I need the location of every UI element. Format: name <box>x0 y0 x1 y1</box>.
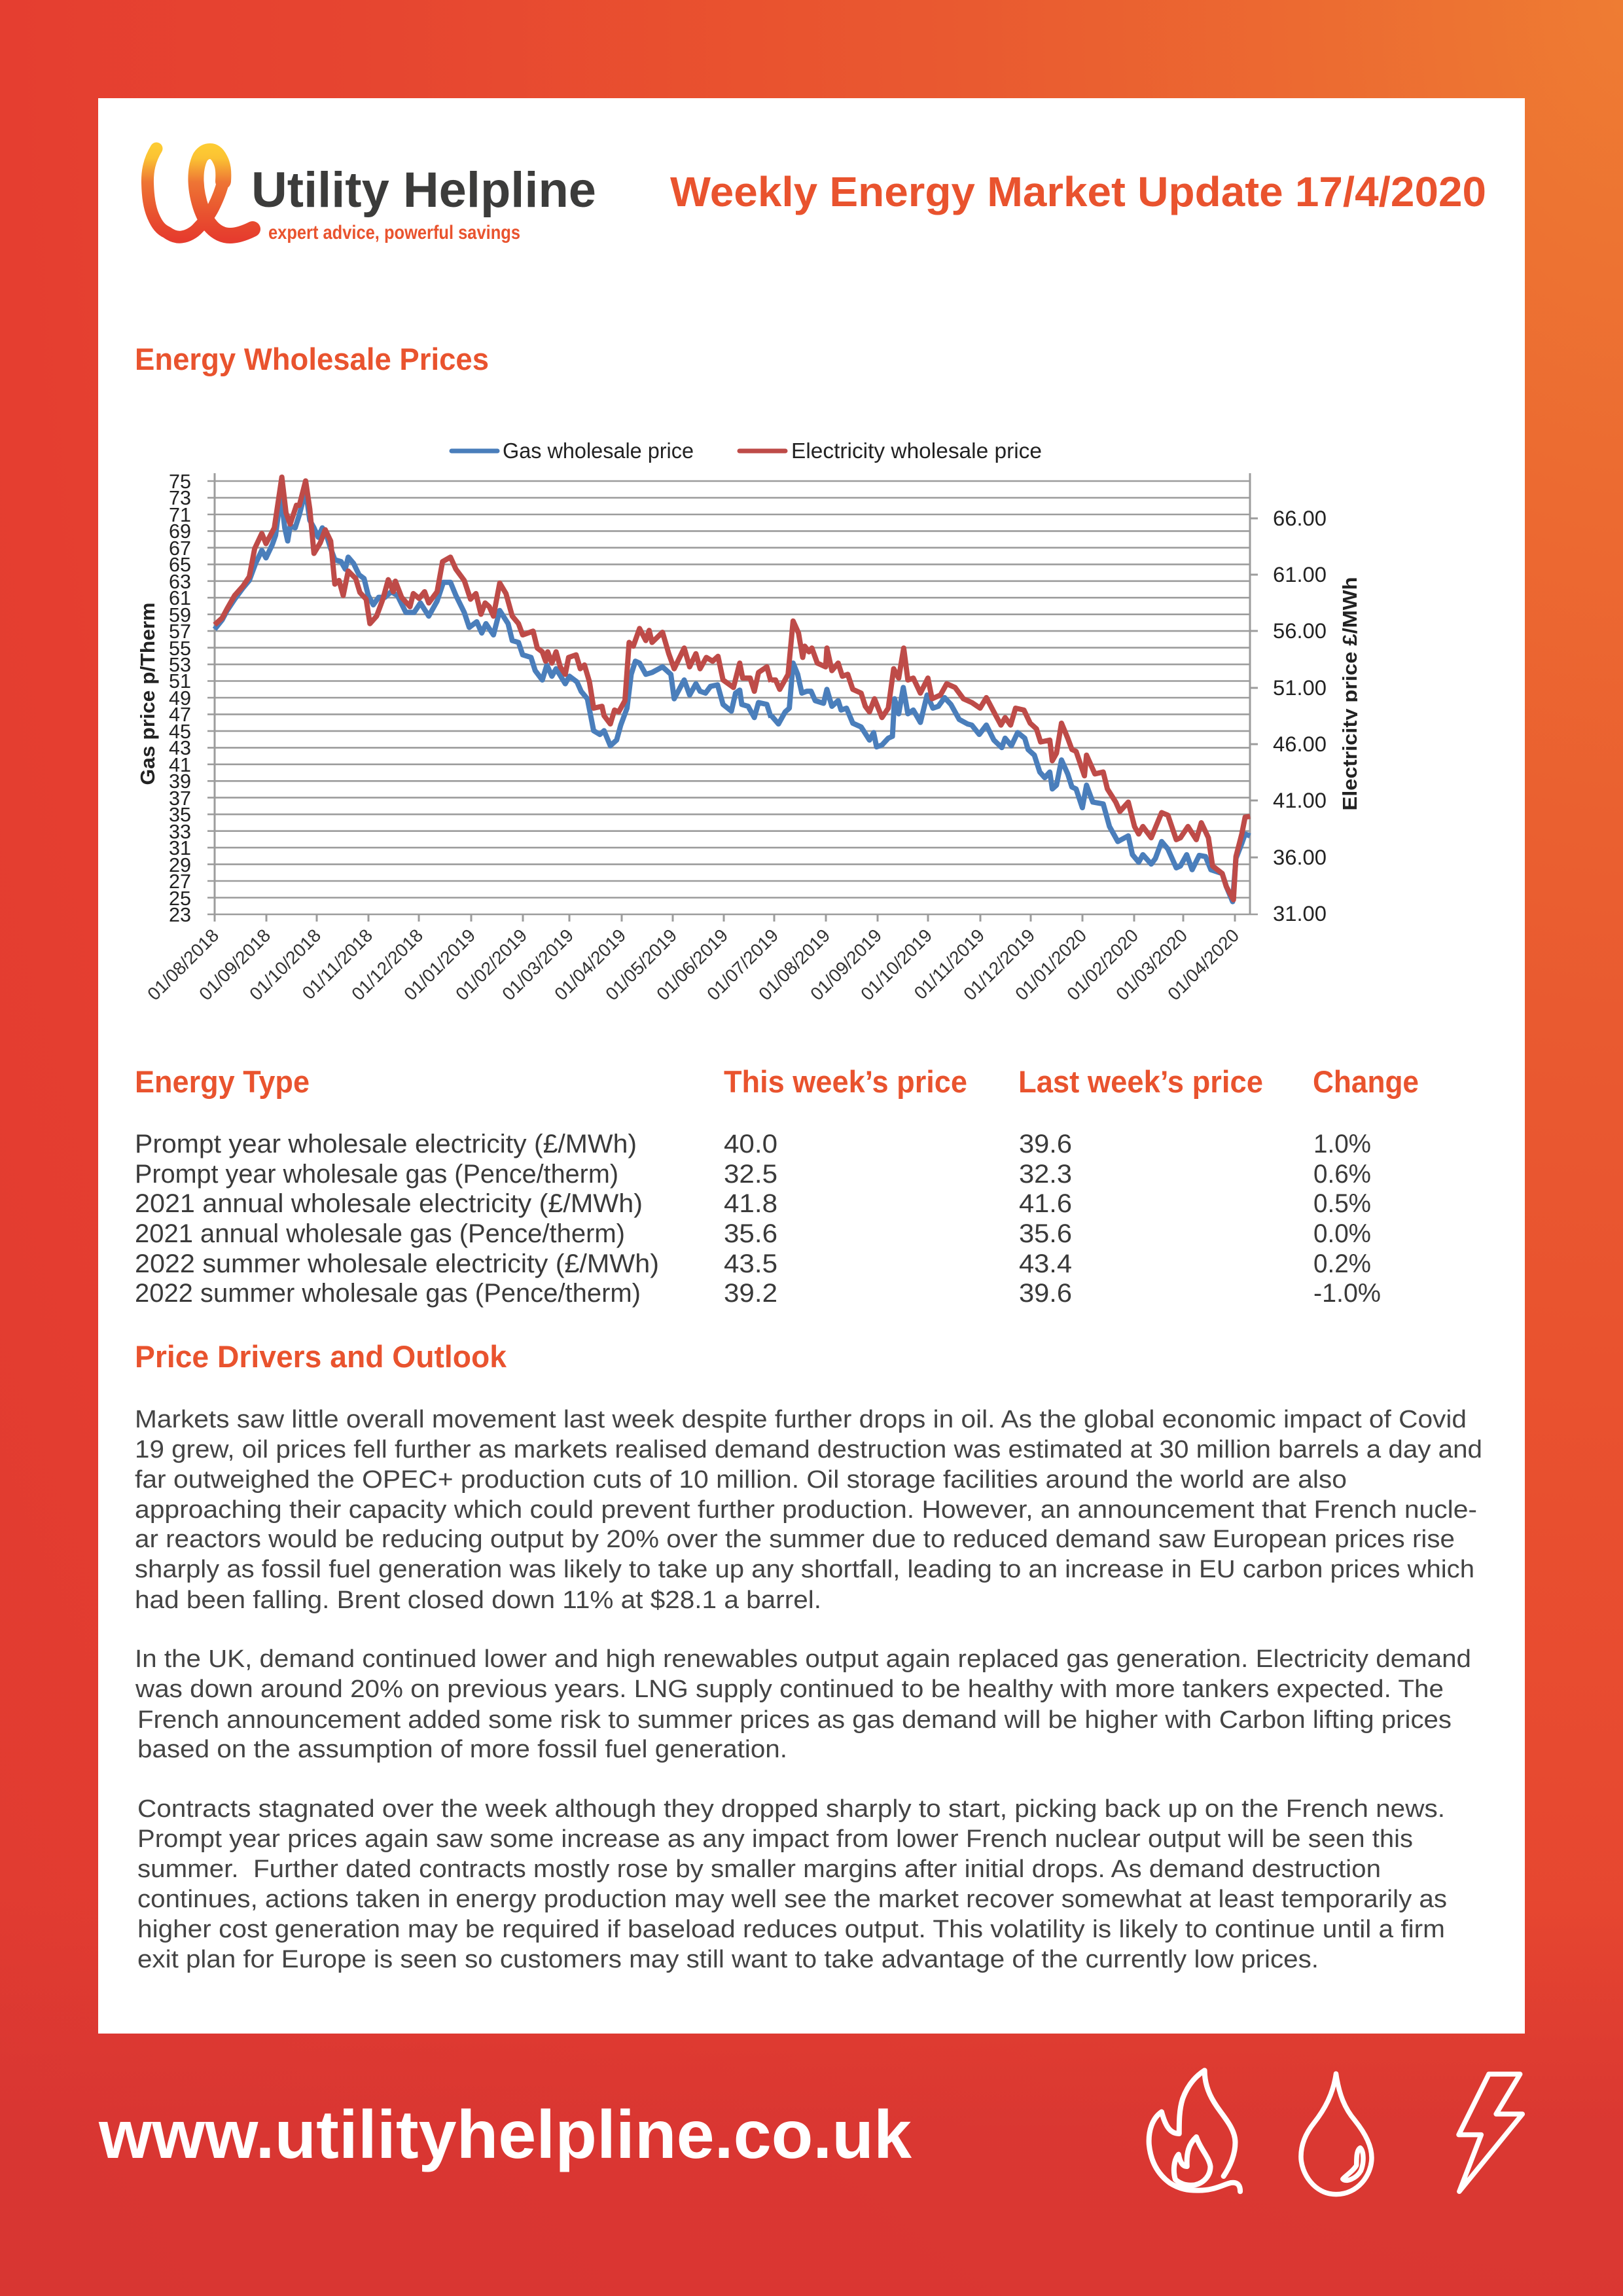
left axis labels: 63 <box>169 570 191 593</box>
left axis labels: 31 <box>169 836 191 859</box>
left axis labels: 61 <box>169 586 191 609</box>
table row: 2021 electricity: 41.6 <box>1019 1189 1072 1218</box>
text block: contracts paragraph: summer. Further dated contracts mostly rose by smaller margins after initial drops. As demand destruction <box>137 1856 1381 1883</box>
icon: water drop <box>1301 2073 1372 2195</box>
table header row: Energy Type <box>135 1064 310 1099</box>
table row: 2021 electricity: 2021 annual wholesale electricity (£/MWh) <box>135 1189 643 1218</box>
table row: 2021 gas: 35.6 <box>724 1219 777 1248</box>
table row: 2021 gas: 0.0% <box>1313 1219 1371 1248</box>
left axis labels: 45 <box>169 720 191 743</box>
heading: energy wholesale prices: Energy Wholesale Prices <box>135 342 489 376</box>
date axis labels: 01/02/2020 <box>1063 925 1142 1004</box>
right axis labels <box>1273 507 1327 925</box>
electricity price line <box>215 477 1250 900</box>
right axis labels: 46.00 <box>1273 732 1327 756</box>
date axis labels: 01/09/2018 <box>195 925 274 1004</box>
logo: Utility Helpline <box>147 149 596 243</box>
date axis labels <box>143 925 1243 1004</box>
left axis labels: 43 <box>169 736 191 759</box>
date axis labels: 01/11/2018 <box>298 925 376 1003</box>
table row: prompt year gas: 32.5 <box>724 1160 777 1189</box>
date axis labels: 01/06/2019 <box>652 925 732 1004</box>
left axis labels <box>169 470 191 926</box>
table row: 2022 electricity: 43.4 <box>1019 1249 1072 1278</box>
left axis title: Gas price p/Therm <box>136 602 159 785</box>
chart: gas and electricity wholesale prices <box>136 439 1366 1004</box>
text block: contracts paragraph <box>137 1795 1447 1973</box>
table row: 2021 gas <box>135 1219 1371 1248</box>
left axis labels: 37 <box>169 787 191 810</box>
right axis labels: 41.00 <box>1273 789 1327 812</box>
left axis labels: 25 <box>169 887 191 910</box>
date axis labels: 01/02/2019 <box>452 925 531 1004</box>
left axis labels: 29 <box>169 853 191 876</box>
right axis labels: 56.00 <box>1273 619 1327 643</box>
text block: UK paragraph: based on the assumption of more fossil fuel generation. <box>137 1736 787 1763</box>
table row: 2022 electricity: 2022 summer wholesale electricity (£/MWh) <box>135 1249 659 1278</box>
text block: markets paragraph: approaching their capacity which could prevent further production. However, an announcement that French nucle- <box>135 1496 1477 1524</box>
date axis labels: 01/09/2019 <box>806 925 885 1004</box>
heading: price drivers and outlook: Price Drivers and Outlook <box>135 1339 507 1374</box>
left axis labels: 57 <box>169 620 191 643</box>
logo tagline: expert advice, powerful savings <box>268 222 520 243</box>
table row: 2022 gas: 2022 summer wholesale gas (Pence/therm) <box>135 1279 641 1308</box>
left axis labels: 33 <box>169 820 191 843</box>
right axis labels: 51.00 <box>1273 676 1327 700</box>
left axis labels: 51 <box>169 670 191 692</box>
table: energy prices <box>135 1064 1419 1308</box>
text block: UK paragraph <box>135 1645 1471 1763</box>
text block: markets paragraph: Markets saw little overall movement last week despite further drops in oil. As the global economic impact of Covid <box>135 1406 1467 1433</box>
left axis labels: 49 <box>169 687 191 709</box>
table row: 2022 gas: 39.2 <box>724 1279 777 1308</box>
table row: 2022 gas: -1.0% <box>1313 1279 1381 1308</box>
icon: flame <box>1149 2070 1240 2191</box>
text block: markets paragraph: far outweighed the OPEC+ production cuts of 10 million. Oil storage facilities around the world are also <box>135 1466 1347 1494</box>
date axis labels: 01/01/2020 <box>1011 925 1090 1004</box>
text block: contracts paragraph: higher cost generation may be required if baseload reduces output. This volatility is likely to continue until a firm <box>137 1916 1445 1943</box>
left axis labels: 35 <box>169 803 191 826</box>
left axis labels: 47 <box>169 703 191 726</box>
table row: 2022 gas <box>135 1279 1381 1308</box>
table row: prompt year electricity: 40.0 <box>724 1130 777 1158</box>
table row: prompt year gas: Prompt year wholesale gas (Pence/therm) <box>135 1160 618 1189</box>
left axis labels: 69 <box>169 520 191 543</box>
table row: 2021 gas: 35.6 <box>1019 1219 1072 1248</box>
logo wordmark: Utility Helpline <box>251 162 596 218</box>
table row: prompt year gas: 0.6% <box>1313 1160 1371 1189</box>
right axis labels: 66.00 <box>1273 507 1327 530</box>
left axis labels: 27 <box>169 870 191 893</box>
text block: UK paragraph: In the UK, demand continued lower and high renewables output again replaced gas generation. Electricity demand <box>135 1645 1471 1673</box>
left axis labels: 55 <box>169 637 191 660</box>
table header row: Change <box>1313 1064 1419 1099</box>
table header row: Last week’s price <box>1018 1064 1263 1099</box>
chart legend <box>452 439 1042 463</box>
text block: UK paragraph: was down around 20% on previous years. LNG supply continued to be healthy with more tankers expected. The <box>135 1676 1444 1703</box>
text block: contracts paragraph: exit plan for Europe is seen so customers may still want to take advantage of the currently low prices. <box>137 1946 1319 1973</box>
table row: 2022 electricity: 0.2% <box>1313 1249 1371 1278</box>
table row: prompt year electricity <box>135 1130 1371 1158</box>
date axis labels: 01/07/2019 <box>703 925 782 1004</box>
website url: www.utilityhelpline.co.uk <box>98 2097 912 2173</box>
left axis labels: 39 <box>169 770 191 793</box>
text block: contracts paragraph: Prompt year prices again saw some increase as any impact from lower French nuclear output will be seen this <box>137 1825 1413 1853</box>
table row: 2021 electricity <box>135 1189 1371 1218</box>
left axis labels: 67 <box>169 537 191 560</box>
date axis labels: 01/05/2019 <box>601 925 681 1004</box>
text block: markets paragraph: sharply as fossil fuel generation was likely to take up any shortfall, leading to an increase in EU carbon prices which <box>135 1556 1474 1583</box>
right axis labels: 61.00 <box>1273 563 1327 586</box>
table row: prompt year gas <box>135 1160 1371 1189</box>
table row: 2022 gas: 39.6 <box>1019 1279 1072 1308</box>
table row: 2021 electricity: 41.8 <box>724 1189 777 1218</box>
text block: markets paragraph <box>135 1406 1482 1614</box>
right axis title: Electricity price £/MWh <box>1338 577 1361 810</box>
right axis labels: 36.00 <box>1273 846 1327 869</box>
table row: 2021 gas: 2021 annual wholesale gas (Pence/therm) <box>135 1219 625 1248</box>
date axis labels: 01/04/2019 <box>550 925 630 1004</box>
left axis labels: 75 <box>169 470 191 493</box>
chart legend: Electricity wholesale price <box>791 439 1042 463</box>
chart legend: Gas wholesale price <box>503 439 694 463</box>
table header row <box>135 1064 1419 1099</box>
date axis labels: 01/03/2019 <box>498 925 577 1004</box>
table header row: This week’s price <box>724 1064 967 1099</box>
date axis labels: 01/10/2019 <box>857 925 936 1004</box>
table row: 2022 electricity <box>135 1249 1371 1278</box>
date axis labels: 01/12/2018 <box>348 925 427 1004</box>
right axis labels: 31.00 <box>1273 902 1327 925</box>
table row: 2021 electricity: 0.5% <box>1313 1189 1371 1218</box>
left axis labels: 65 <box>169 553 191 576</box>
left axis labels: 73 <box>169 486 191 509</box>
icon: lightning bolt <box>1459 2074 1522 2191</box>
table row: prompt year electricity: 1.0% <box>1313 1130 1371 1158</box>
text block: markets paragraph: ar reactors would be reducing output by 20% over the summer due to reduced demand saw European prices rise <box>135 1526 1455 1553</box>
table row: prompt year electricity: 39.6 <box>1019 1130 1072 1158</box>
date axis labels: 01/01/2019 <box>400 925 479 1004</box>
date axis labels: 01/12/2019 <box>959 925 1039 1004</box>
left axis labels: 41 <box>169 753 191 776</box>
table row: prompt year gas: 32.3 <box>1019 1160 1072 1189</box>
date axis labels: 01/04/2020 <box>1164 925 1243 1004</box>
left axis labels: 71 <box>169 503 191 526</box>
text block: contracts paragraph: continues, actions taken in energy production may well see the market recover somewhat at least temporarily as <box>137 1886 1447 1913</box>
panel: white content sheet <box>98 98 1525 2034</box>
date axis labels: 01/08/2019 <box>755 925 834 1004</box>
text block: UK paragraph: French announcement added some risk to summer prices as gas demand will be higher with Carbon lifting prices <box>137 1706 1452 1734</box>
date axis labels: 01/03/2020 <box>1112 925 1191 1004</box>
date axis labels: 01/11/2019 <box>910 925 988 1003</box>
icon: logo swoosh <box>147 149 253 237</box>
title: Weekly Energy Market Update 17/4/2020 <box>670 168 1486 215</box>
date axis labels: 01/10/2018 <box>245 925 325 1004</box>
left axis labels: 23 <box>169 903 191 926</box>
table row: prompt year electricity: Prompt year wholesale electricity (£/MWh) <box>135 1130 637 1158</box>
text block: contracts paragraph: Contracts stagnated over the week although they dropped sharply to start, picking back up on the French news. <box>137 1795 1445 1823</box>
date axis labels: 01/08/2018 <box>143 925 223 1004</box>
left axis labels: 59 <box>169 603 191 626</box>
left axis labels: 53 <box>169 653 191 676</box>
table row: 2022 electricity: 43.5 <box>724 1249 777 1278</box>
text block: markets paragraph: had been falling. Brent closed down 11% at $28.1 a barrel. <box>135 1587 821 1614</box>
text block: markets paragraph: 19 grew, oil prices fell further as markets realised demand destruction was estimated at 30 million barrels a day and <box>135 1436 1482 1463</box>
gas price line <box>215 490 1250 902</box>
